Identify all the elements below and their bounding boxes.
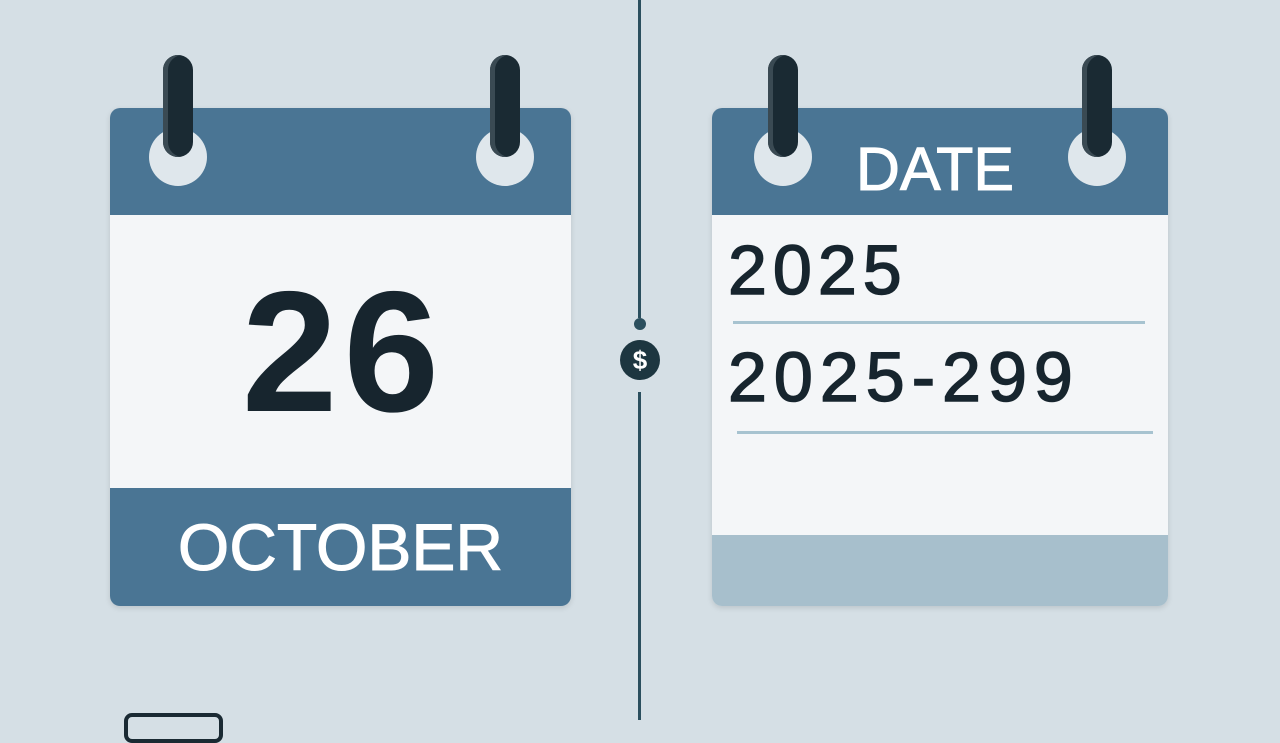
panel: left calendar (110, 108, 571, 606)
day number: 26 (242, 256, 445, 448)
year: 2025 (728, 231, 908, 309)
month label (110, 488, 571, 606)
header: DATE: DATE (856, 135, 1014, 203)
ordinal date: 2025-299 (728, 338, 1080, 416)
icon: dollar badge (620, 340, 660, 380)
icon: dollar badge: $ (633, 345, 647, 375)
icon: bottom box (124, 713, 223, 743)
panel: right calendar (712, 108, 1168, 606)
month label: OCTOBER (178, 510, 503, 584)
